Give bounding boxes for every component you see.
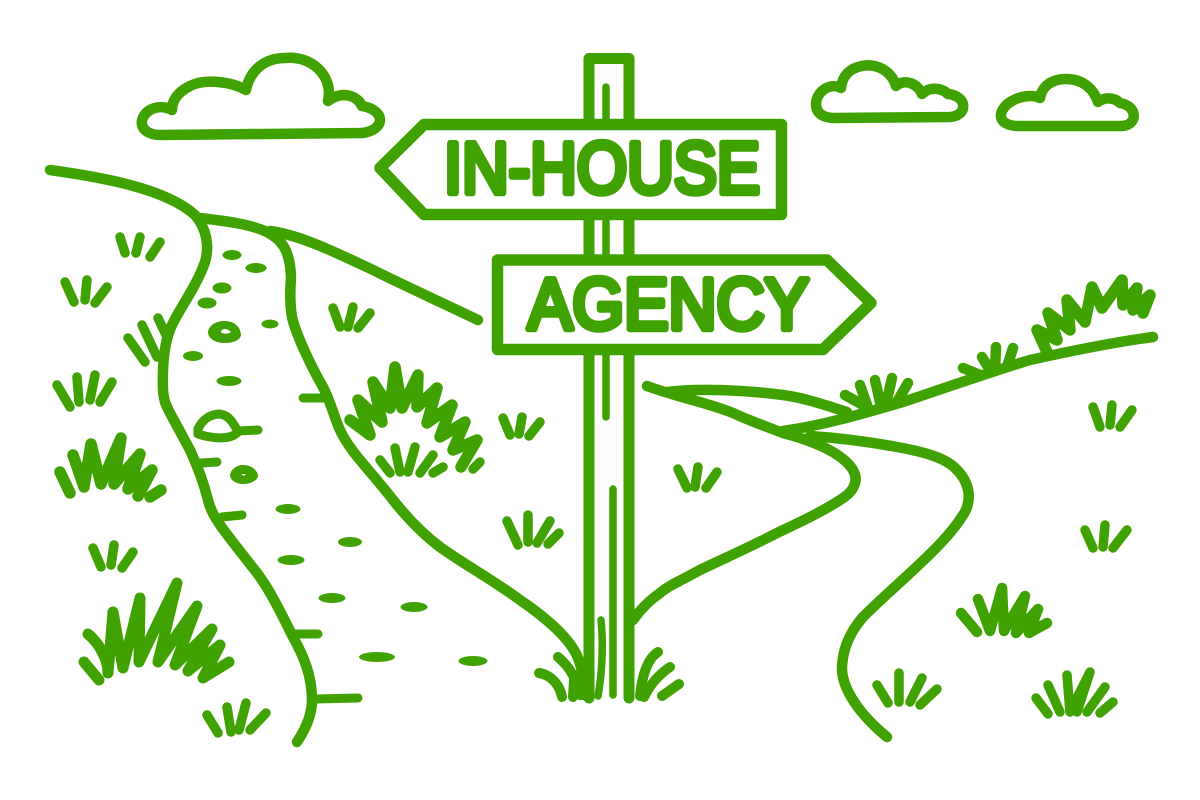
grass: mid-left tuft — [57, 375, 112, 407]
path: hill ridge right — [783, 337, 1153, 431]
grass: left tuft — [65, 280, 107, 303]
road stones — [183, 250, 488, 666]
path: road right edge — [200, 218, 584, 695]
grass: large left tuft — [60, 438, 161, 497]
grass: right of post tuft — [678, 467, 717, 488]
grass: post base right — [640, 652, 679, 697]
post grain middle — [602, 220, 610, 417]
bush: ridge small a — [845, 378, 908, 405]
path: winding road inner edge — [633, 386, 856, 620]
grass: right mid tuft — [1085, 525, 1127, 548]
post grain lower — [609, 489, 617, 695]
bush: ridge small b — [963, 347, 1013, 375]
grass: right upper tuft — [1093, 405, 1132, 427]
grass: right medium tuft — [961, 588, 1047, 633]
cloud: large left — [142, 58, 380, 135]
grass: lower-left small tuft — [93, 545, 133, 568]
path: winding road outer edge — [810, 436, 969, 737]
grass: top-left tuft — [120, 237, 160, 257]
bush: centre arch — [350, 367, 480, 473]
grass: bottom right tuft a — [877, 673, 937, 705]
post outline — [589, 58, 629, 698]
grass: bottom-left large tuft — [84, 583, 229, 680]
cloud: upper right — [816, 65, 963, 118]
ridge dashes — [201, 398, 358, 699]
post grain top — [602, 87, 610, 119]
grass: centre tuft — [503, 417, 540, 436]
sign: In-house: IN-HOUSE — [444, 129, 760, 209]
grass: road-side tuft — [333, 307, 370, 328]
signpost — [380, 58, 871, 698]
grass: ridge tuft — [128, 318, 167, 362]
path: left hill ridge — [50, 170, 312, 742]
path: far hill upper line — [667, 390, 847, 412]
path: hill line to sign — [270, 231, 478, 320]
stone with hook — [198, 414, 258, 438]
grass: post base left — [539, 657, 580, 697]
bush: ridge zigzag — [1037, 280, 1150, 352]
cloud: far right — [1001, 79, 1134, 126]
grass: centre lower tuft — [507, 515, 559, 545]
sign: Agency: AGENCY — [528, 265, 809, 345]
grass: bottom tuft — [207, 703, 266, 733]
grass: bottom right tuft b — [1036, 672, 1113, 714]
post grain base — [598, 620, 602, 696]
